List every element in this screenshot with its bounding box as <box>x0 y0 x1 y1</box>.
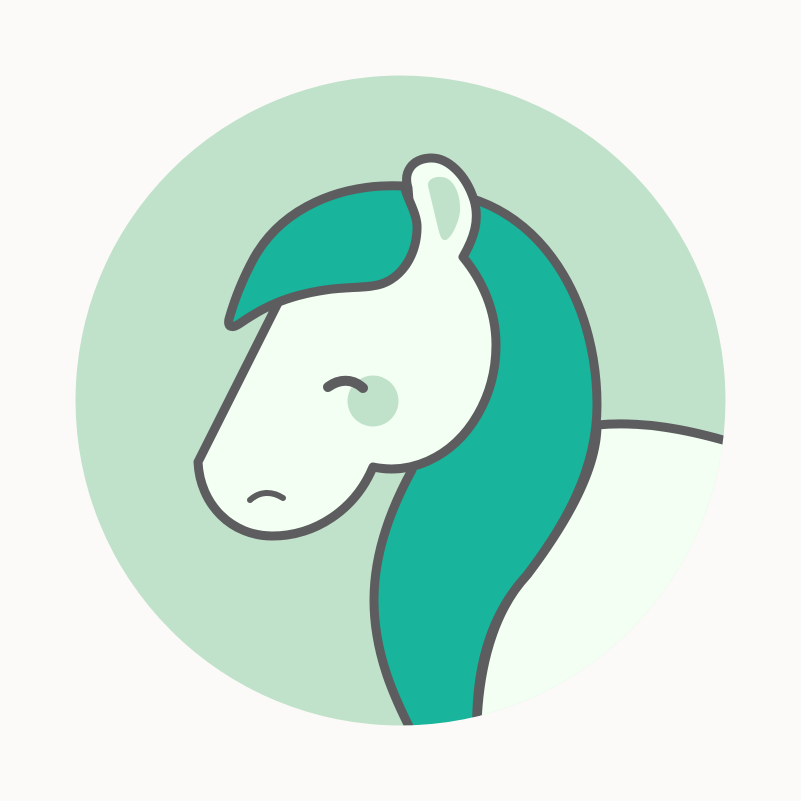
horse head <box>198 158 496 536</box>
cheek <box>348 376 398 426</box>
background circle <box>76 76 726 726</box>
nostril <box>250 493 283 500</box>
mane back <box>374 198 597 740</box>
eye <box>328 381 363 388</box>
forelock <box>229 186 417 327</box>
inner ear <box>428 177 460 240</box>
illustration: horse in circle <box>76 76 726 726</box>
horse body <box>473 419 724 718</box>
